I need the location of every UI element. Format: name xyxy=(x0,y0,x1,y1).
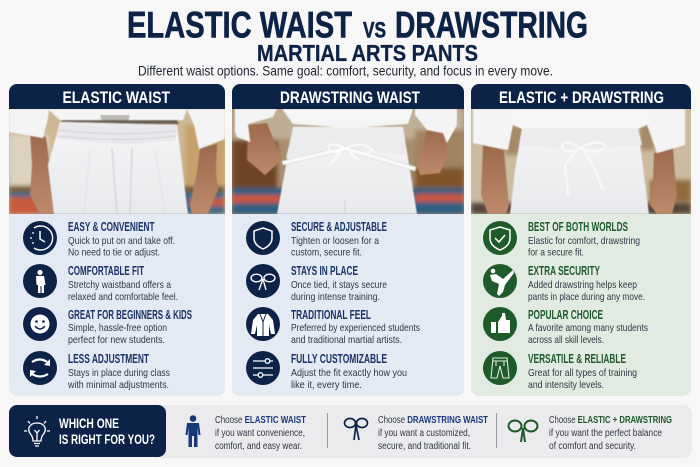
feature text: extra security xyxy=(528,264,645,303)
feature text: secure and adjustable: SECURE & ADJUSTABLE xyxy=(291,220,387,234)
choice text: elastic xyxy=(215,415,306,452)
choice text: drawstring: Choose DRAWSTRING WAIST xyxy=(378,415,488,426)
feature text: beginners and kids: perfect for new students. xyxy=(68,335,165,346)
feature text: versatile and reliable: Great for all types of training xyxy=(528,368,637,379)
choice text: elastic plus drawstring: if you want the perfect balance xyxy=(549,428,662,439)
feature text: easy and convenient: EASY & CONVENIENT xyxy=(68,220,155,234)
feature text: stays in place: STAYS IN PLACE xyxy=(291,264,358,278)
panel background xyxy=(232,112,464,396)
feature text: extra security: Added drawstring helps keep xyxy=(528,280,637,291)
title: ELASTIC WAIST xyxy=(127,4,352,46)
feature text: comfortable fit: Stretchy waistband offers a xyxy=(68,280,171,291)
feature text: traditional feel: Preferred by experienced students xyxy=(291,323,420,334)
header label: DRAWSTRING WAIST xyxy=(280,89,420,107)
header bar xyxy=(9,84,225,109)
header bar xyxy=(471,84,691,109)
feature text: comfortable fit xyxy=(68,264,178,303)
comparison strip background xyxy=(150,405,692,458)
feature text: popular choice: across all skill levels. xyxy=(528,335,604,346)
choice text: elastic: comfort, and easy wear. xyxy=(215,441,302,452)
header label: ELASTIC + DRAWSTRING xyxy=(499,89,664,107)
callout text: WHICH ONE xyxy=(59,416,119,431)
icon: cycle arrows xyxy=(23,351,57,385)
title: DRAWSTRING xyxy=(395,4,588,46)
choice text: elastic plus drawstring: Choose ELASTIC + DRAWSTRING xyxy=(549,415,672,426)
header label: ELASTIC WAIST xyxy=(62,89,170,107)
choice text: drawstring: secure, and traditional fit. xyxy=(378,441,471,452)
photo: tying the drawstring xyxy=(232,109,464,214)
icon: green knot xyxy=(508,420,538,442)
feature text: versatile and reliable: and intensity levels. xyxy=(528,380,604,391)
icon: blue knot xyxy=(344,418,368,440)
feature text: secure and adjustable: Tighten or loosen for a xyxy=(291,236,379,247)
photo: elastic and drawstring waist xyxy=(471,109,691,214)
feature text: beginners and kids: Simple, hassle-free option xyxy=(68,323,167,334)
feature text: beginners and kids xyxy=(68,308,192,346)
feature text: comfortable fit: COMFORTABLE FIT xyxy=(68,264,144,278)
icon: gi jacket xyxy=(246,307,280,341)
title xyxy=(127,4,588,46)
panel background xyxy=(9,112,225,396)
feature text: popular choice: POPULAR CHOICE xyxy=(528,308,603,322)
feature text: best of both worlds: BEST OF BOTH WORLDS xyxy=(528,220,628,234)
feature text: stays in place: Once tied, it stays secure xyxy=(291,280,387,291)
feature text: popular choice xyxy=(528,308,648,346)
icon: light bulb xyxy=(24,416,50,446)
feature text: easy and convenient: No need to tie or adjust. xyxy=(68,248,160,258)
feature text: versatile and reliable: VERSATILE & RELIABLE xyxy=(528,352,626,366)
choice text: drawstring: if you want a customized, xyxy=(378,428,470,439)
feature text: traditional feel: and traditional martial artists. xyxy=(291,335,402,346)
choice text: elastic: if you want convenience, xyxy=(215,428,305,439)
feature text: extra security: EXTRA SECURITY xyxy=(528,264,600,278)
icon: knot xyxy=(246,264,280,298)
feature text: traditional feel xyxy=(291,308,420,346)
panel: drawstring waist xyxy=(232,84,464,396)
panel: elastic plus drawstring xyxy=(471,84,691,396)
choice text: elastic plus drawstring: of comfort and security. xyxy=(549,441,636,452)
icon: sliders xyxy=(246,351,280,385)
panel: elastic waist xyxy=(9,84,225,396)
feature text: versatile and reliable xyxy=(528,352,637,391)
feature text: best of both worlds: Elastic for comfort, drawstring xyxy=(528,236,640,247)
icon: shield xyxy=(246,221,280,255)
feature text: traditional feel: TRADITIONAL FEEL xyxy=(291,308,371,322)
choice text: elastic plus drawstring xyxy=(549,415,672,452)
feature text: beginners and kids: GREAT FOR BEGINNERS & KIDS xyxy=(68,308,192,322)
feature text: secure and adjustable: custom, secure fit. xyxy=(291,248,362,258)
panel background xyxy=(471,112,691,396)
icon: smile xyxy=(23,307,57,341)
feature text: popular choice: A favorite among many students xyxy=(528,323,648,334)
feature text: less adjustment: with minimal adjustments. xyxy=(67,380,169,391)
feature text: fully customizable: FULLY CUSTOMIZABLE xyxy=(291,352,387,366)
subtitle heading: MARTIAL ARTS PANTS xyxy=(257,40,478,66)
icon: shield check xyxy=(483,221,517,255)
feature text: easy and convenient xyxy=(68,220,175,258)
photo: elastic waistband xyxy=(9,109,225,214)
choice text: elastic: Choose ELASTIC WAIST xyxy=(215,415,306,426)
feature text: less adjustment: LESS ADJUSTMENT xyxy=(68,352,149,366)
icon: martial arts kick xyxy=(483,264,517,298)
callout box xyxy=(9,405,166,457)
feature text: less adjustment xyxy=(67,352,170,391)
icon: clock xyxy=(23,221,57,255)
tagline: Different waist options. Same goal: comfort, security, and focus in every move. xyxy=(138,64,553,78)
feature text: fully customizable: Adjust the fit exactly how you xyxy=(291,368,407,379)
feature text: fully customizable: like it, every time. xyxy=(291,380,362,391)
callout text: IS RIGHT FOR YOU? xyxy=(59,432,155,447)
panel: which one is right for you xyxy=(9,405,692,458)
icon: pants xyxy=(483,351,517,385)
feature text: easy and convenient: Quick to put on and take off. xyxy=(68,236,175,247)
feature text: stays in place xyxy=(291,264,387,303)
header bar xyxy=(232,84,464,109)
feature text: less adjustment: Stays in place during class xyxy=(68,368,170,379)
feature text: best of both worlds: for a secure fit. xyxy=(528,248,584,258)
choice text: drawstring xyxy=(378,415,488,452)
feature text: best of both worlds xyxy=(528,220,640,258)
feature text: extra security: pants in place during any move. xyxy=(528,292,645,303)
feature text: comfortable fit: relaxed and comfortable feel. xyxy=(68,292,178,303)
title: VS xyxy=(363,18,386,42)
feature text: fully customizable xyxy=(291,352,407,391)
icon: thumbs up xyxy=(483,307,517,341)
icon: person xyxy=(23,264,57,298)
feature text: stays in place: during intense training. xyxy=(291,292,380,303)
icon: person blue xyxy=(186,415,200,447)
callout text xyxy=(59,416,155,447)
feature text: secure and adjustable xyxy=(291,220,387,258)
